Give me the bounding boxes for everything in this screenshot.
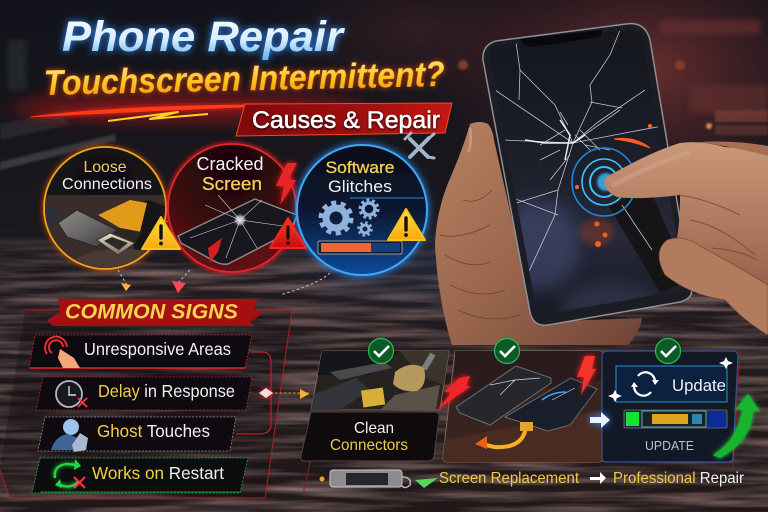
icon: red warning triangle, cracked screen (270, 218, 306, 248)
icon: yellow warning triangle, loose connections (142, 217, 180, 249)
sign: works on restart: Works on Restart (92, 463, 224, 483)
dotted connectors between circles (118, 219, 330, 295)
cracks (495, 30, 668, 280)
icon: gears (321, 200, 378, 236)
repair tools strip: Professional Repair (613, 470, 745, 487)
sign: works on restart (32, 458, 248, 493)
icon: green arrow (415, 478, 438, 488)
repair tools strip (320, 470, 745, 488)
sign: delay in response: Delay in Response (98, 381, 235, 401)
sign: ghost touches: Ghost Touches (97, 421, 210, 441)
repair card: clean connectors (301, 338, 449, 461)
common signs heading banner (47, 299, 262, 326)
label: loose connections (62, 159, 152, 193)
subtitle: Touchscreen Intermittent?: Touchscreen Intermittent? (43, 55, 445, 103)
phone with cracked screen (483, 24, 692, 327)
cable plug (58, 200, 147, 255)
markers: connector arrow heads (121, 281, 186, 293)
repair card: screen replacement (443, 338, 603, 462)
right hand pressing the screen (604, 142, 768, 335)
label: cracked screen (196, 154, 264, 194)
icon: check badge (656, 338, 680, 364)
banner: Causes & Repair (236, 103, 452, 136)
sign: unresponsive areas (29, 335, 252, 368)
label: clean connectors: Connectors (330, 437, 408, 454)
icon: white arrow (590, 472, 606, 484)
sign: ghost touches (38, 417, 236, 452)
icon: ghost hand (51, 419, 88, 452)
label: clean connectors (330, 420, 408, 454)
label: clean connectors: Clean (354, 420, 394, 437)
label: cracked screen: Screen (202, 174, 262, 194)
notch (520, 30, 602, 47)
cause: cracked screen (168, 144, 297, 275)
status bar (624, 410, 727, 428)
bottom glowing divider (304, 493, 730, 495)
sign: unresponsive areas: Unresponsive Areas (84, 339, 231, 359)
label: loose connections: Loose (84, 159, 127, 176)
common signs panel frame (0, 310, 292, 498)
label: cracked screen: Cracked (196, 154, 264, 174)
repair tools strip: Screen Replacement (439, 470, 580, 487)
label: loose connections: Connections (62, 176, 152, 193)
icon: yellow warning triangle, software glitches (388, 209, 425, 240)
embers (575, 124, 652, 247)
repair card: update: UPDATE (645, 438, 694, 453)
touch ripple rings (572, 148, 636, 216)
icon: check badge (368, 338, 394, 364)
decorative red streak and yellow spark (30, 105, 300, 121)
label: software glitches: Software (326, 158, 394, 177)
sign: delay in response (36, 377, 252, 410)
repair card: update (602, 338, 760, 462)
icon: red lightning (577, 356, 596, 395)
icon: red lightning between cards (437, 376, 471, 410)
cracked phone (178, 195, 297, 264)
connector: signs to repair cards (236, 352, 310, 434)
icon: check badge (494, 338, 520, 364)
sparkles (608, 357, 733, 402)
repair panel frame (303, 352, 740, 494)
label: software glitches: Glitches (328, 177, 392, 196)
common signs heading banner: COMMON SIGNS (65, 300, 238, 324)
orange swap arrow (475, 422, 533, 449)
icon: clock with x (56, 381, 87, 407)
replacement phones (456, 366, 597, 431)
icon: brush (393, 354, 433, 391)
icon: wrench and screwdriver (405, 133, 434, 158)
progress bar (318, 241, 402, 254)
cause: software glitches (297, 145, 427, 275)
icon: restart arrows (55, 459, 85, 488)
update button: Update (672, 377, 726, 395)
left hand holding the phone (435, 122, 642, 345)
cause: loose connections (40, 147, 170, 280)
icon: connector tool (320, 470, 410, 488)
title: Phone Repair: Phone Repair (62, 13, 345, 61)
icon: tap (45, 337, 80, 368)
banner: Causes & Repair: Causes & Repair (252, 107, 440, 134)
update button (616, 366, 727, 402)
icon: white arrow to update card (590, 412, 610, 428)
icon: green up arrow (713, 394, 760, 458)
icon: lightning bolt (276, 163, 297, 205)
label: software glitches (326, 158, 394, 196)
